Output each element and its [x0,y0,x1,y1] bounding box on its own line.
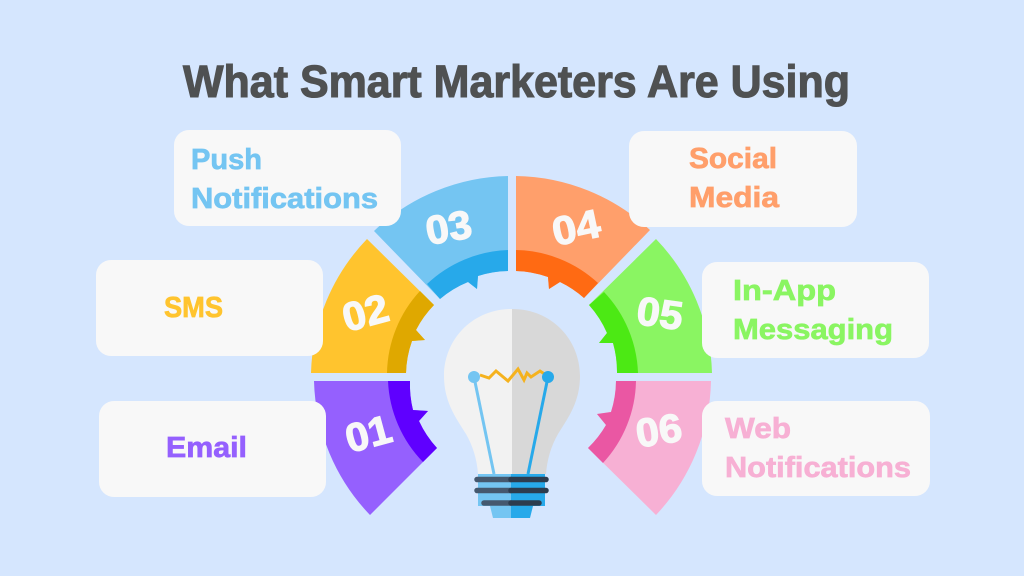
card: In-App Messaging: Messaging [733,314,893,346]
card: Push Notifications: Push [191,144,262,176]
number 06: 06 [633,406,685,456]
segment 05: green [589,239,712,373]
bulb glass [444,309,512,474]
card: Social Media: Social [689,143,777,175]
number 04: 04 [548,202,605,255]
title: What Smart Marketers Are Using [183,56,850,107]
card: Push Notifications [174,130,401,226]
segment 04: orange [516,176,650,298]
number 03: 03 [422,203,475,254]
card: SMS: SMS [164,292,223,324]
card: Web Notifications: Notifications [725,452,911,484]
filament wires [474,377,494,474]
card: SMS [96,260,323,356]
number 02: 02 [338,286,394,341]
card: Email: Email [166,432,247,464]
card: Push Notifications: Notifications [191,183,378,215]
segment 03: light blue [374,176,508,299]
card: Web Notifications [702,401,930,496]
segment 06: pink [588,381,711,515]
number 05: 05 [634,289,686,339]
segment 01: purple [314,381,437,515]
card: Email [99,401,326,497]
number 01: 01 [341,407,397,462]
card: Web Notifications: Web [725,413,791,445]
card: Social Media [629,131,857,227]
screw base [478,474,511,518]
icon: light bulb [444,309,580,518]
card: In-App Messaging: In-App [733,275,836,307]
card: Social Media: Media [689,182,780,214]
segment 02: yellow [311,239,434,373]
card: In-App Messaging [702,262,929,358]
